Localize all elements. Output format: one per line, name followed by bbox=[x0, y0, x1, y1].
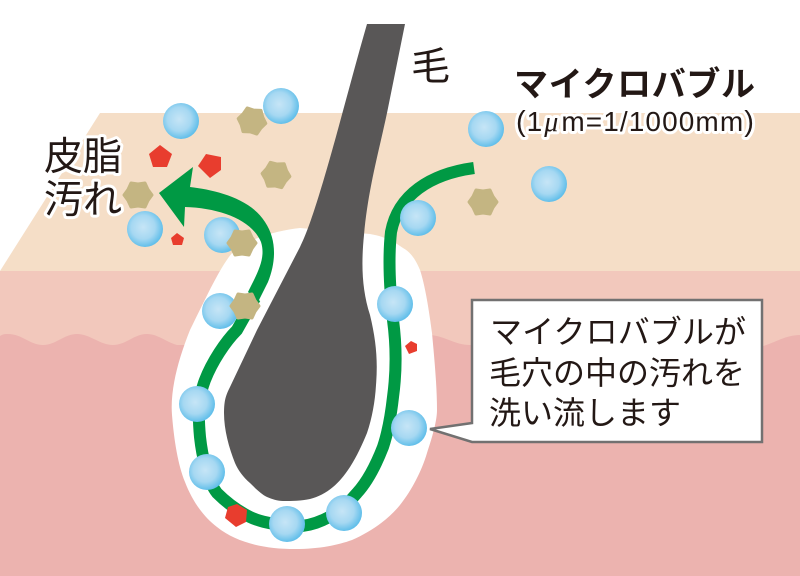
green flow line right and bottom bbox=[199, 168, 474, 526]
skin middle layer bbox=[0, 271, 800, 576]
callout box: 洗い流します bbox=[489, 395, 681, 431]
red dirt particles bbox=[149, 145, 417, 527]
hair follicle pore bbox=[172, 228, 437, 549]
label: sebum dirt bbox=[44, 136, 122, 222]
hair bbox=[224, 24, 405, 501]
label: microbubble size: (1μm=1/1000mm) bbox=[516, 106, 754, 138]
label: sebum dirt: 汚れ bbox=[44, 179, 122, 222]
skin surface layer bbox=[0, 113, 800, 271]
skin lower layer bbox=[0, 334, 800, 576]
callout box: マイクロバブルが bbox=[490, 314, 746, 350]
callout box bbox=[430, 300, 762, 442]
label: hair: 毛 bbox=[411, 46, 450, 89]
label: microbubble title: マイクロバブル bbox=[514, 65, 755, 104]
label: sebum dirt: 皮脂 bbox=[44, 136, 122, 179]
callout box: 毛穴の中の汚れを bbox=[489, 355, 745, 391]
bubbles bbox=[127, 88, 567, 542]
green arrow bbox=[159, 167, 274, 302]
tan sebum particles bbox=[124, 107, 497, 318]
